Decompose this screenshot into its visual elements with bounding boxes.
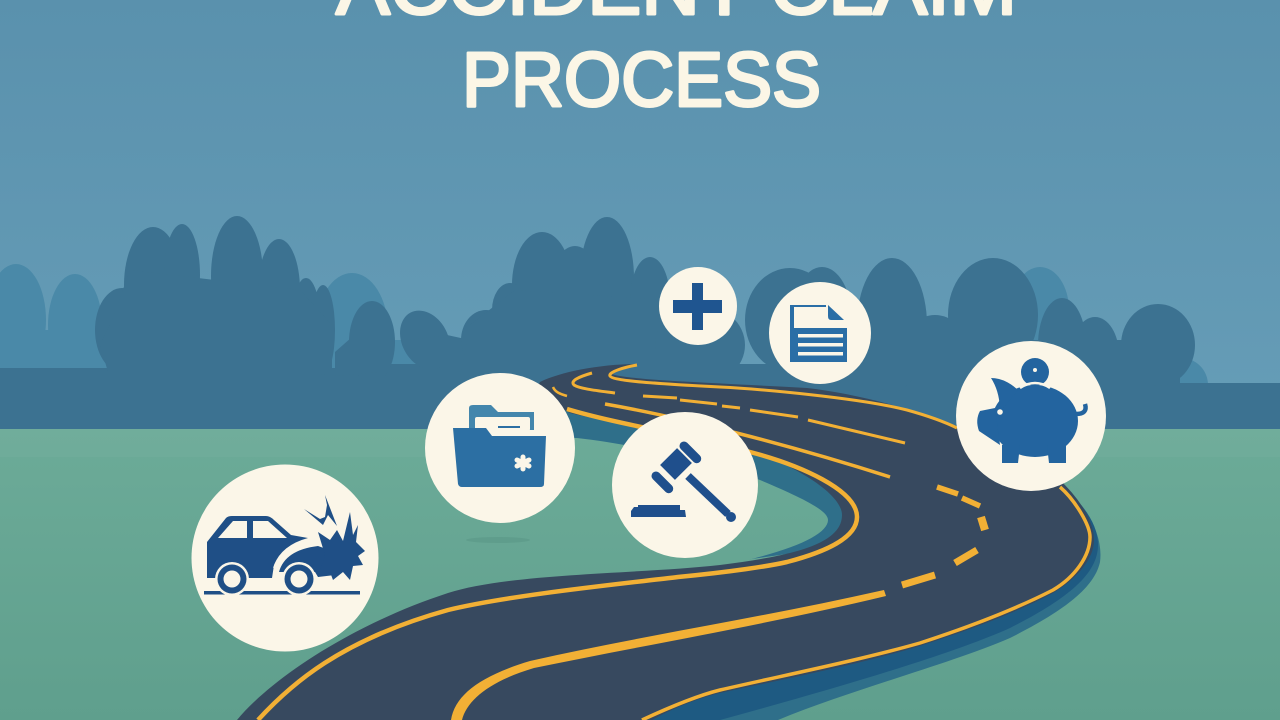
- inner curve grass: [540, 438, 828, 582]
- ground: [0, 429, 1280, 720]
- icon: medical folder: [425, 373, 575, 523]
- icon: document: [769, 282, 871, 384]
- dark tree line: [0, 216, 1280, 430]
- road outer edge: [640, 484, 1098, 720]
- sky background: [0, 0, 1280, 430]
- icon: gavel: [612, 412, 758, 558]
- road: [237, 364, 1094, 720]
- title: PROCESS: [462, 37, 821, 123]
- icon: car crash: [192, 464, 378, 652]
- icon: medical cross: [659, 267, 737, 345]
- inner curve shadow: [555, 400, 852, 562]
- icon: piggy bank: [956, 341, 1106, 491]
- road markings: [258, 365, 1090, 720]
- light background trees: [0, 264, 1208, 412]
- title: [336, 0, 1017, 123]
- road outer shadow: [640, 484, 1100, 720]
- folder shadow: [466, 537, 530, 543]
- asterisk: [517, 457, 529, 469]
